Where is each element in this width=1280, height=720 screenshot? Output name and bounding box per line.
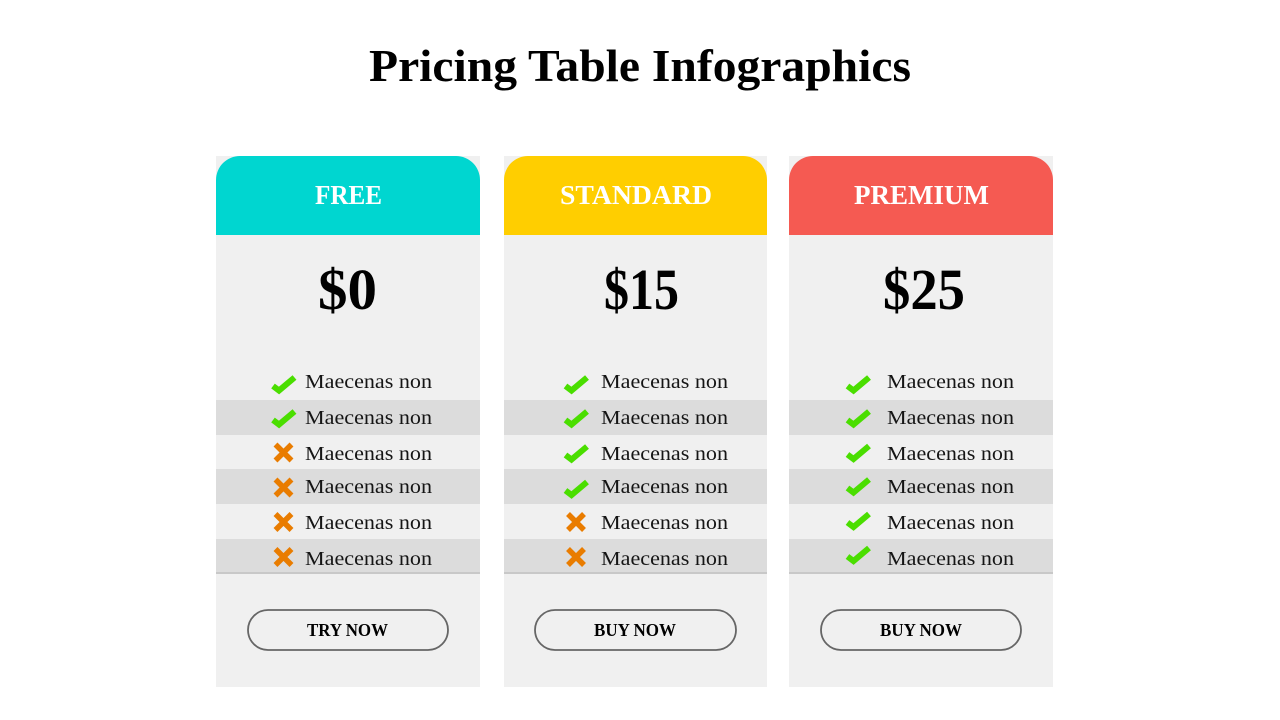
price: free: $0 bbox=[318, 257, 377, 322]
button label: try now: TRY NOW bbox=[307, 620, 388, 640]
row band 2 bbox=[789, 400, 1053, 435]
feature text: Maecenas non bbox=[305, 476, 432, 498]
icon: cross bbox=[568, 514, 584, 530]
feature text: Maecenas non bbox=[601, 443, 728, 465]
heading: standard: STANDARD bbox=[560, 180, 712, 210]
panel: standard plan bbox=[504, 156, 767, 687]
row band 4 bbox=[789, 469, 1053, 504]
icon: check bbox=[566, 412, 587, 424]
feature text: Maecenas non bbox=[601, 548, 728, 570]
feature text: Maecenas non bbox=[887, 407, 1014, 429]
list bottom rule bbox=[504, 572, 767, 574]
feature text: Maecenas non bbox=[887, 371, 1014, 393]
icon: check bbox=[848, 446, 869, 459]
row band 2 bbox=[216, 400, 480, 435]
icon: check bbox=[848, 412, 869, 424]
button outline: try now bbox=[248, 610, 448, 650]
row band 4 bbox=[504, 469, 767, 504]
icon: check bbox=[566, 378, 587, 390]
icon: check bbox=[273, 378, 294, 390]
header: free bbox=[216, 156, 480, 235]
row band 2 bbox=[504, 400, 767, 435]
icon: cross bbox=[276, 549, 292, 565]
price: standard: $15 bbox=[604, 257, 679, 322]
icon: check bbox=[848, 548, 869, 561]
button outline: buy now bbox=[535, 610, 736, 650]
feature text: Maecenas non bbox=[305, 371, 432, 393]
row band 6 bbox=[504, 539, 767, 573]
list bottom rule bbox=[789, 572, 1053, 574]
icon: check bbox=[273, 412, 294, 424]
icon: check bbox=[848, 480, 869, 492]
header: premium bbox=[789, 156, 1053, 235]
header: standard bbox=[504, 156, 767, 235]
title: Pricing Table Infographics bbox=[369, 40, 911, 91]
icon: cross bbox=[276, 444, 292, 460]
list bottom rule bbox=[216, 572, 480, 574]
icon: cross bbox=[276, 514, 292, 530]
feature text: Maecenas non bbox=[887, 443, 1014, 465]
panel: premium plan bbox=[789, 156, 1053, 687]
feature text: Maecenas non bbox=[305, 548, 432, 570]
button label: buy now: BUY NOW bbox=[880, 620, 962, 640]
icon: check bbox=[566, 482, 587, 495]
feature text: Maecenas non bbox=[601, 476, 728, 498]
feature text: Maecenas non bbox=[601, 371, 728, 393]
feature text: Maecenas non bbox=[305, 407, 432, 429]
icon: check bbox=[566, 446, 587, 460]
feature text: Maecenas non bbox=[601, 407, 728, 429]
heading: premium: PREMIUM bbox=[854, 180, 989, 210]
row band 4 bbox=[216, 469, 480, 504]
button outline: buy now bbox=[821, 610, 1021, 650]
row band 6 bbox=[216, 539, 480, 573]
icon: cross bbox=[276, 480, 292, 496]
panel: free plan bbox=[216, 156, 480, 687]
feature text: Maecenas non bbox=[887, 548, 1014, 570]
price: premium: $25 bbox=[883, 257, 965, 322]
feature text: Maecenas non bbox=[305, 512, 432, 534]
feature text: Maecenas non bbox=[305, 443, 432, 465]
icon: check bbox=[848, 378, 869, 390]
row band 6 bbox=[789, 539, 1053, 573]
feature text: Maecenas non bbox=[887, 476, 1014, 498]
feature text: Maecenas non bbox=[601, 512, 728, 534]
feature text: Maecenas non bbox=[887, 512, 1014, 534]
button label: buy now: BUY NOW bbox=[594, 620, 676, 640]
icon: check bbox=[848, 514, 869, 527]
heading: free: FREE bbox=[315, 180, 382, 210]
icon: cross bbox=[568, 549, 584, 565]
